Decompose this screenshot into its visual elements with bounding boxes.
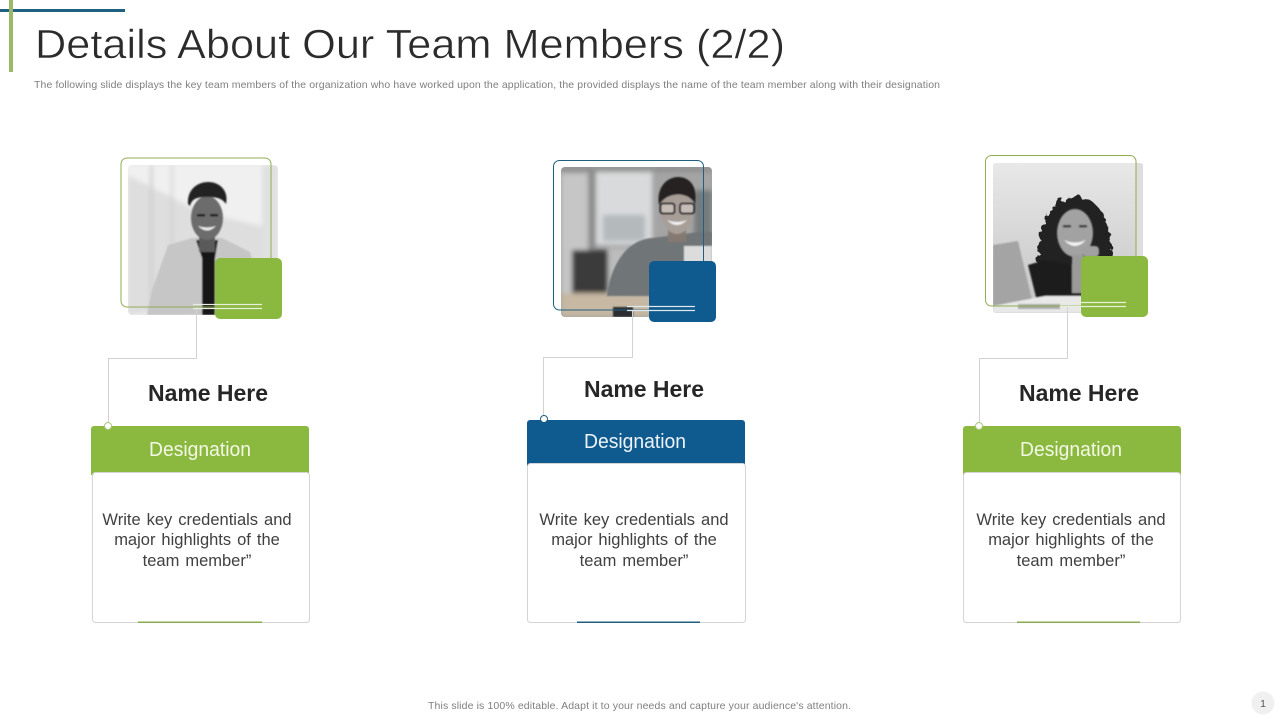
- photo frame: [554, 160, 704, 310]
- header accent lines: [0, 0, 125, 72]
- credentials card: major highlights of the: [551, 531, 717, 549]
- designation header: [963, 426, 1181, 475]
- green square: [1081, 256, 1148, 317]
- green square: [215, 258, 282, 319]
- credentials card: Write key credentials and: [539, 511, 729, 529]
- connector dot: [540, 416, 548, 422]
- credentials card: Write key credentials and: [976, 511, 1166, 529]
- photo: woman in blazer: [128, 165, 278, 315]
- photo: woman with curly hair: [993, 163, 1143, 313]
- page number: [1252, 692, 1274, 714]
- team member 2: [527, 160, 746, 623]
- white lines: [627, 306, 695, 310]
- credentials card: team member”: [143, 552, 251, 570]
- name: Name Here: [148, 380, 268, 406]
- white lines: [1060, 302, 1126, 306]
- designation header: Designation: [149, 439, 251, 461]
- credentials card: [92, 472, 310, 623]
- credentials card: major highlights of the: [114, 531, 280, 549]
- credentials card: Write key credentials and: [102, 511, 292, 529]
- connector dot: [976, 422, 982, 430]
- credentials card: team member”: [1017, 552, 1125, 570]
- photo frame: [121, 158, 271, 307]
- photo: man with glasses: [561, 167, 712, 317]
- connector dot: [104, 422, 112, 430]
- designation header: [527, 420, 745, 466]
- credentials card: team member”: [580, 552, 688, 570]
- page number: 1: [1260, 698, 1266, 710]
- connector: [980, 307, 1068, 426]
- team member 1: [91, 158, 310, 623]
- name: Name Here: [584, 376, 704, 402]
- connector: [544, 311, 632, 420]
- credentials card: [964, 472, 1180, 623]
- team member 3: [963, 156, 1181, 623]
- designation header: [91, 426, 309, 475]
- title: Details About Our Team Members (2/2): [35, 21, 785, 67]
- photo frame: [986, 156, 1136, 306]
- footer note: This slide is 100% editable. Adapt it to your needs and capture your audience's attention.: [428, 700, 851, 712]
- name: Name Here: [1019, 380, 1139, 406]
- credentials card: major highlights of the: [988, 531, 1154, 549]
- designation header: Designation: [584, 431, 686, 453]
- subtitle: The following slide displays the key team members of the organization who have worked upon the application, the provided displays the name of the team member along with their designation: [34, 79, 940, 91]
- blue square: [649, 261, 716, 322]
- white lines: [193, 304, 262, 308]
- designation header: Designation: [1020, 439, 1122, 461]
- credentials card: [528, 464, 746, 623]
- connector: [108, 309, 196, 426]
